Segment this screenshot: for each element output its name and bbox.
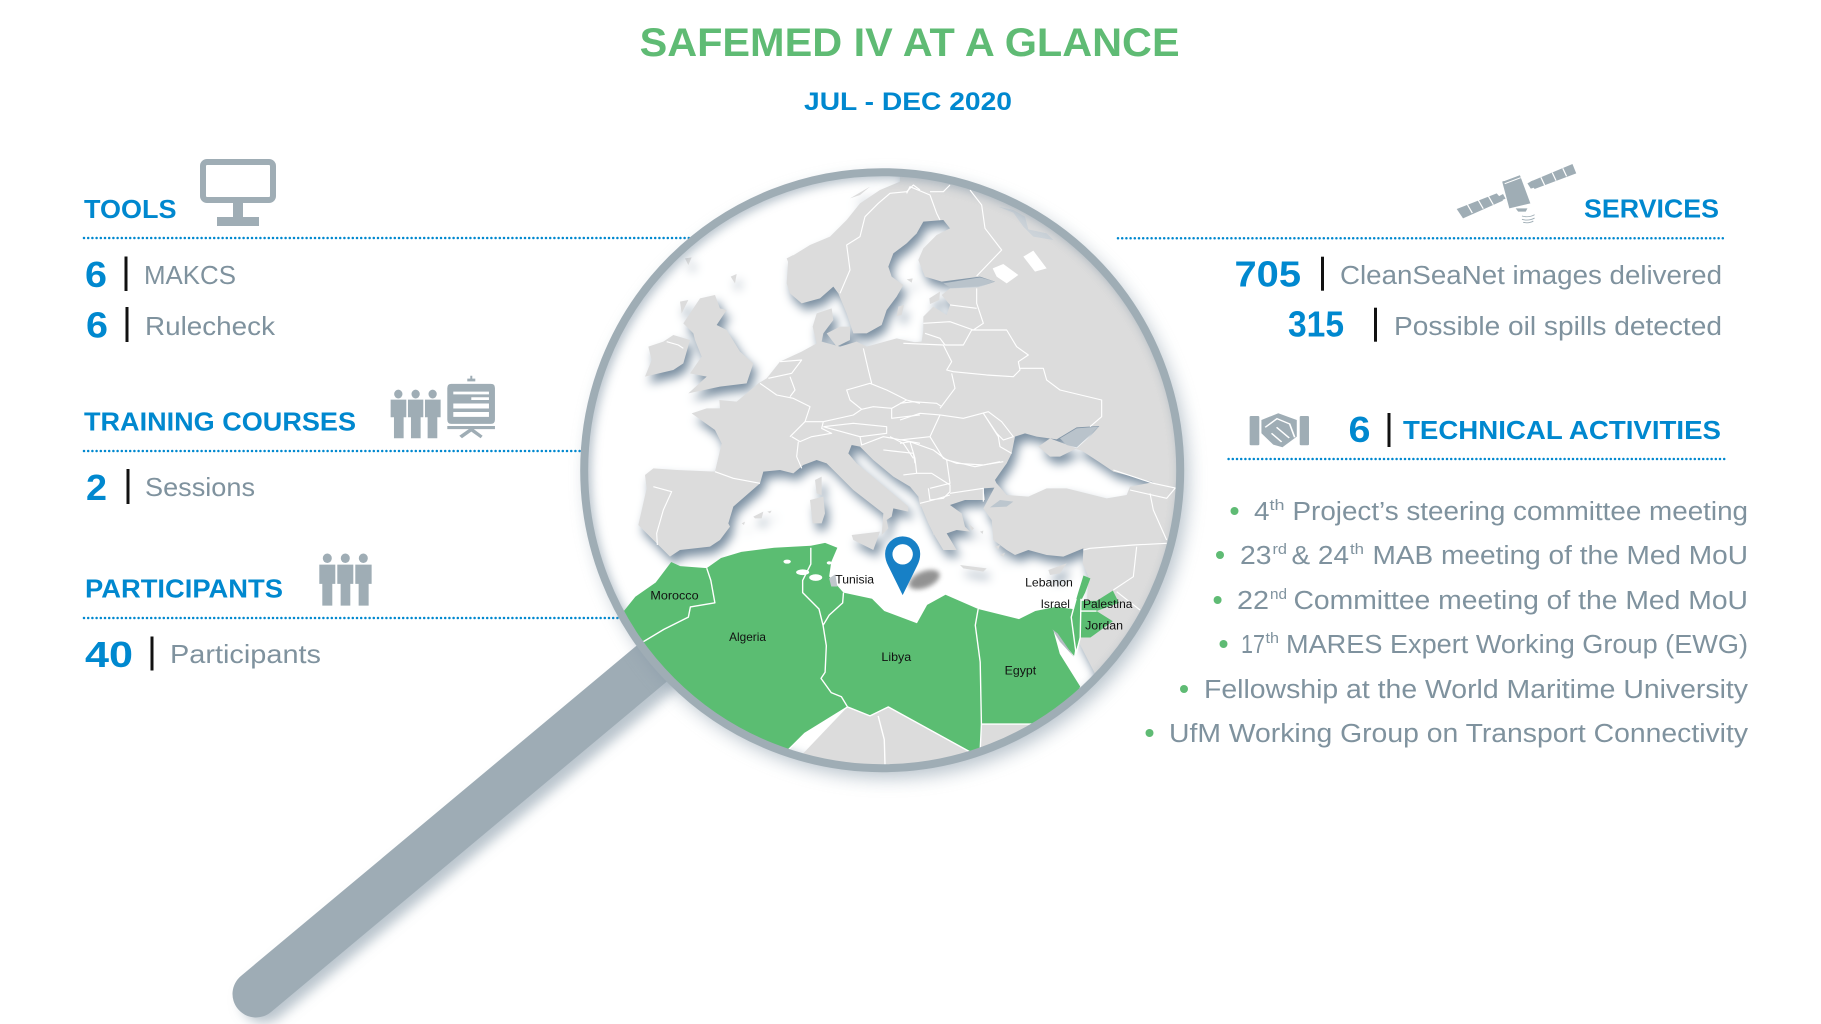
activity: committee meeting: 22 — [1237, 587, 1269, 615]
panel: services — [1118, 164, 1723, 345]
icon: satellite — [1457, 164, 1576, 223]
activity: MAB meeting: MAB meeting of the Med MoU — [1372, 542, 1748, 570]
activity: MAB meeting — [1216, 541, 1748, 570]
country labels: Egypt — [1005, 663, 1037, 677]
icon: monitor — [203, 162, 273, 226]
MAKCS stat: MAKCS — [144, 260, 236, 290]
sessions stat: 2 — [86, 467, 107, 508]
tools heading: TOOLS — [84, 194, 176, 224]
country labels — [650, 572, 1133, 677]
magnifying glass with map — [580, 168, 1184, 772]
activity: steering committee: th — [1270, 497, 1284, 514]
country labels: Morocco — [650, 589, 699, 603]
map of Europe and the Mediterranean — [588, 176, 1176, 764]
MAKCS stat — [85, 254, 236, 295]
panel: tools — [84, 162, 690, 346]
spills stat: 315 — [1288, 304, 1344, 345]
spills stat: Possible oil spills detected — [1394, 313, 1722, 341]
gulf of Suez — [1052, 629, 1074, 657]
magnifying glass handle — [256, 640, 680, 1000]
MAKCS stat: 6 — [85, 254, 107, 295]
panel: participants — [84, 554, 622, 675]
activity: fellowship: Fellowship at the World Maritime University — [1204, 676, 1748, 704]
highlighted countries — [619, 543, 1119, 752]
lens inner vignette — [585, 173, 1185, 773]
European borders — [653, 185, 920, 545]
activity: steering committee: Project’s steering committee meeting — [1292, 498, 1748, 526]
sessions stat — [86, 467, 255, 508]
African lands — [804, 708, 1029, 764]
icon: people — [319, 554, 372, 606]
African borders — [643, 548, 1097, 768]
icon: handshake — [1250, 413, 1309, 447]
map pin shadow — [906, 566, 942, 593]
chotts — [783, 560, 832, 581]
panel: technical activities — [1146, 409, 1748, 748]
Rulecheck stat: 6 — [86, 304, 108, 346]
technical activities count: 6 — [1348, 409, 1370, 450]
images stat — [1234, 254, 1722, 295]
country labels: Algeria — [729, 630, 766, 644]
participants stat: 40 — [85, 634, 133, 675]
activity: MAB meeting: 23 — [1240, 542, 1272, 570]
services heading: SERVICES — [1584, 194, 1719, 224]
activity: MARES expert working group: th — [1266, 630, 1279, 647]
panel: training courses — [84, 376, 582, 508]
participants stat: Participants — [170, 639, 321, 669]
land: Europe and surrounding countries — [636, 177, 1176, 678]
inland seas and lakes — [943, 207, 1099, 447]
training heading: TRAINING COURSES — [84, 406, 356, 436]
activity: UfM working group: UfM Working Group on Transport Connectivity — [1169, 720, 1748, 748]
country labels: Palestina — [1083, 597, 1133, 611]
sessions stat: Sessions — [145, 472, 255, 502]
activity: MARES expert working group: 17 — [1241, 631, 1265, 659]
lens shadow — [588, 178, 1188, 778]
country labels: Israel — [1041, 597, 1070, 611]
activity: committee meeting: Committee meeting of the Med MoU — [1294, 587, 1748, 615]
icon: map pin — [885, 536, 920, 595]
Rulecheck stat — [86, 304, 276, 346]
images stat: CleanSeaNet images delivered — [1340, 262, 1722, 290]
icon: trainees and presentation board — [391, 376, 495, 438]
activity: MARES expert working group: MARES Expert Working Group (EWG) — [1286, 631, 1748, 659]
activity: MAB meeting: & 24 — [1292, 542, 1349, 570]
images stat: 705 — [1234, 254, 1301, 295]
activity: steering committee: 4 — [1254, 498, 1270, 526]
country labels: Libya — [881, 650, 911, 664]
activity: committee meeting: nd — [1270, 586, 1287, 603]
country labels: Jordan — [1085, 618, 1123, 632]
activity: MAB meeting: th — [1350, 541, 1364, 558]
lens ring — [584, 172, 1180, 768]
country labels: Lebanon — [1025, 576, 1073, 590]
participants heading: PARTICIPANTS — [85, 574, 283, 604]
title: SAFEMED IV AT A GLANCE — [640, 21, 1180, 65]
date subtitle: JUL - DEC 2020 — [804, 88, 1012, 116]
country labels: Tunisia — [835, 572, 874, 586]
participants stat — [85, 634, 321, 675]
activity: MAB meeting: rd — [1272, 541, 1287, 558]
Rulecheck stat: Rulecheck — [145, 311, 276, 341]
spills stat — [1288, 304, 1722, 345]
technical activities heading: TECHNICAL ACTIVITIES — [1403, 415, 1721, 445]
